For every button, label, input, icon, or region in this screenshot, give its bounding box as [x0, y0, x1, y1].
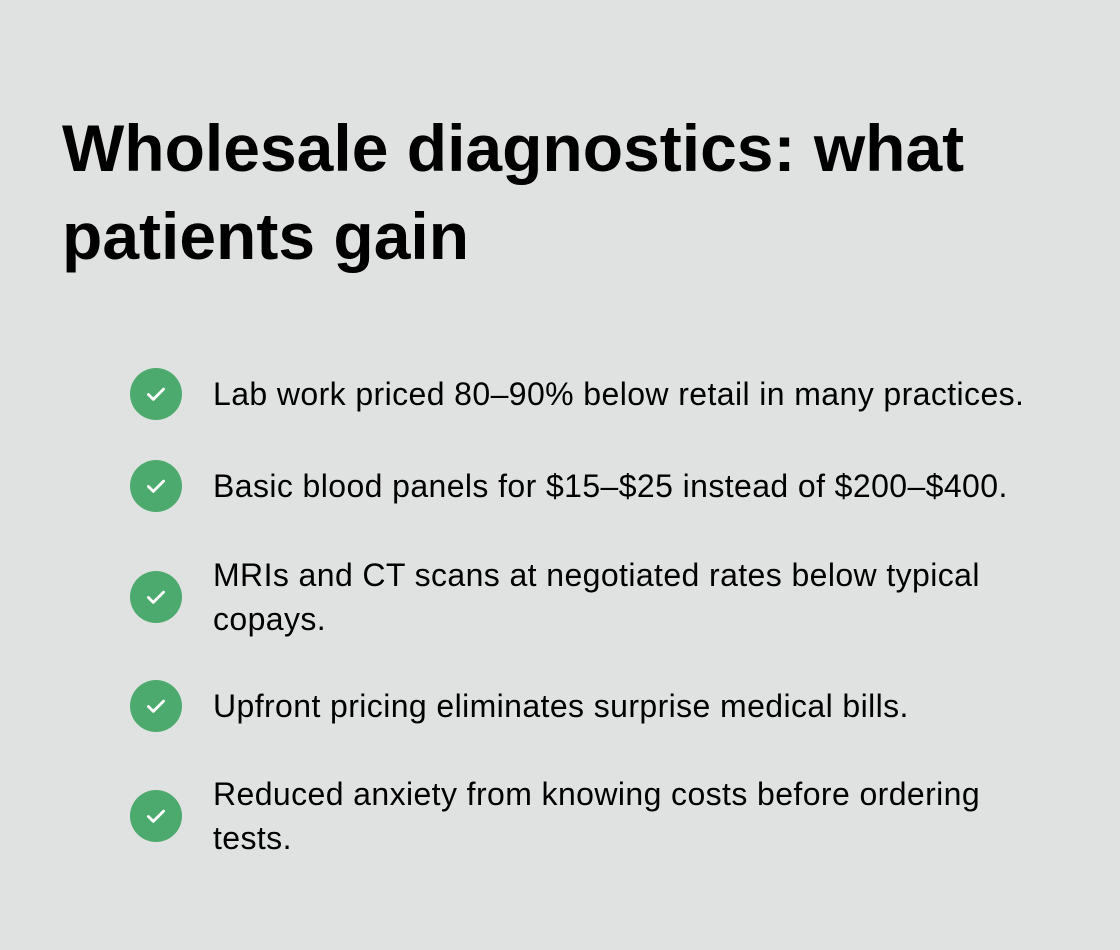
title: patients gain [62, 199, 469, 273]
icon: check [130, 460, 182, 512]
icon: check [130, 790, 182, 842]
text [213, 557, 980, 637]
icon: check [130, 368, 182, 420]
text: Reduced anxiety from knowing costs before ordering [213, 776, 980, 812]
item 1 [130, 368, 1024, 420]
text: tests. [213, 820, 292, 856]
text: Upfront pricing eliminates surprise medical bills. [213, 688, 909, 724]
icon: check [130, 571, 182, 623]
text: Lab work priced 80–90% below retail in many practices. [213, 376, 1024, 412]
text: copays. [213, 601, 326, 637]
text: MRIs and CT scans at negotiated rates below typical [213, 557, 980, 593]
item 4 [130, 680, 909, 732]
item 3 [130, 557, 980, 637]
item 5 [130, 776, 980, 856]
icon: check [130, 680, 182, 732]
title: Wholesale diagnostics: what [62, 111, 964, 185]
title [62, 111, 964, 273]
text [213, 776, 980, 856]
item 2 [130, 460, 1008, 512]
text: Basic blood panels for $15–$25 instead of $200–$400. [213, 468, 1008, 504]
